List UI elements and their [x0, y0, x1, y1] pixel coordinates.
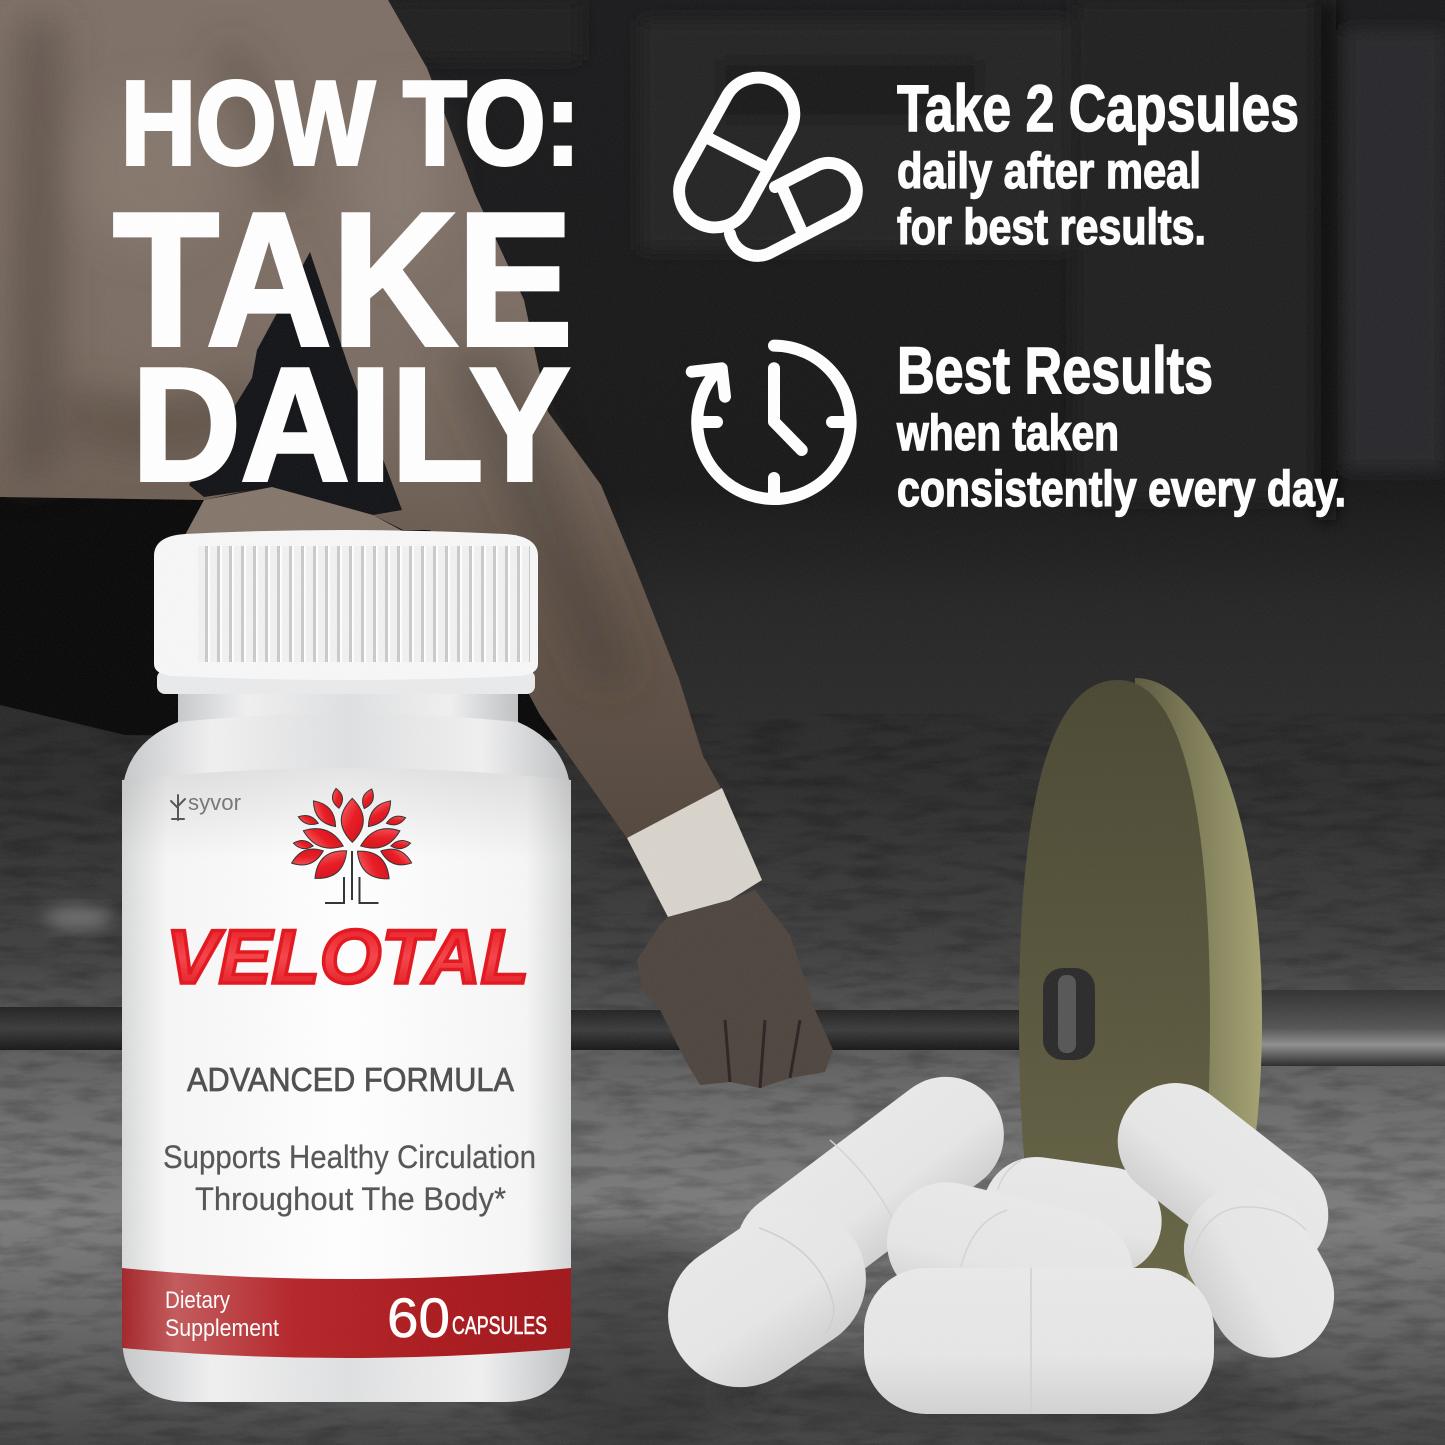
floor texture: [0, 780, 1445, 1445]
text: supports healthy circulation: Supports Healthy Circulation: [163, 1139, 536, 1175]
pile of capsules: [640, 1054, 1356, 1415]
bottle collar: [157, 670, 535, 694]
heading: how to take daily: DAILY: [132, 335, 570, 515]
text: dietary supplement: [165, 1287, 279, 1342]
left floor debris: [44, 906, 112, 930]
heading: how to take daily: [113, 57, 580, 515]
red band: [122, 1268, 571, 1358]
icon: clock with arrow: [692, 346, 851, 499]
athlete torso and arm: [0, 0, 722, 838]
forearm behind cap: [185, 487, 410, 535]
text: take 2 capsules: for best results.: [897, 199, 1206, 255]
barbell left: [0, 1007, 125, 1050]
bottle body: [122, 714, 571, 1402]
icon: small tree: [171, 795, 185, 820]
text: 60 capsules: CAPSULES: [452, 1312, 547, 1340]
floor shadow: [480, 1230, 780, 1445]
barbell middle: [570, 1010, 1050, 1050]
text: best results: [896, 333, 1346, 517]
muscle shading: [10, 20, 640, 690]
text: 60 capsules: [387, 1286, 547, 1349]
wall details: [380, 0, 1445, 520]
capsule center: [874, 1170, 1146, 1346]
supplement bottle: [122, 530, 571, 1402]
barbell right: [1255, 990, 1445, 1066]
heading: how to take daily: HOW TO:: [121, 57, 580, 190]
capsule right: [1162, 1164, 1356, 1380]
wrist wrap: [627, 788, 762, 917]
text: supports healthy circulation: [163, 1139, 536, 1217]
text: best results: Best Results: [897, 333, 1213, 407]
brand: syvor: syvor: [188, 790, 241, 815]
text: dietary supplement: Supplement: [165, 1315, 279, 1342]
cap ribs: [198, 546, 530, 662]
text: dietary supplement: Dietary: [165, 1287, 230, 1314]
capsule back center: [975, 1150, 1169, 1282]
text: take 2 capsules: daily after meal: [897, 143, 1201, 199]
icon: capsules: [666, 65, 857, 256]
text: 60 capsules: 60: [387, 1286, 450, 1349]
capsule right back: [1094, 1060, 1352, 1296]
bottle label: [122, 768, 571, 1358]
heading: how to take daily: TAKE: [113, 174, 573, 386]
text: advanced formula: ADVANCED FORMULA: [187, 1061, 514, 1098]
text: best results: consistently every day.: [897, 461, 1346, 517]
text: take 2 capsules: Take 2 Capsules: [897, 71, 1299, 145]
bottle cap: [154, 530, 538, 680]
capsule front: [864, 1268, 1214, 1414]
brand name: velotal: VELOTAL: [166, 915, 529, 1000]
text: supports healthy circulation: Throughout The Body*: [195, 1181, 506, 1217]
icon: red tree logo: [289, 787, 414, 886]
weight plate: [1019, 678, 1262, 1362]
capsule back left: [713, 1054, 1027, 1330]
text: best results: when taken: [896, 405, 1119, 461]
capsule left: [640, 1179, 894, 1415]
tree trunk: [325, 851, 378, 903]
bottle neck: [178, 680, 518, 730]
hand: [637, 890, 833, 1088]
text: take 2 capsules: [897, 71, 1299, 255]
gap between torso and arm: [189, 252, 402, 515]
pile shadow: [710, 1365, 1310, 1425]
label top shading: [122, 768, 571, 860]
dark shorts: [0, 490, 560, 740]
